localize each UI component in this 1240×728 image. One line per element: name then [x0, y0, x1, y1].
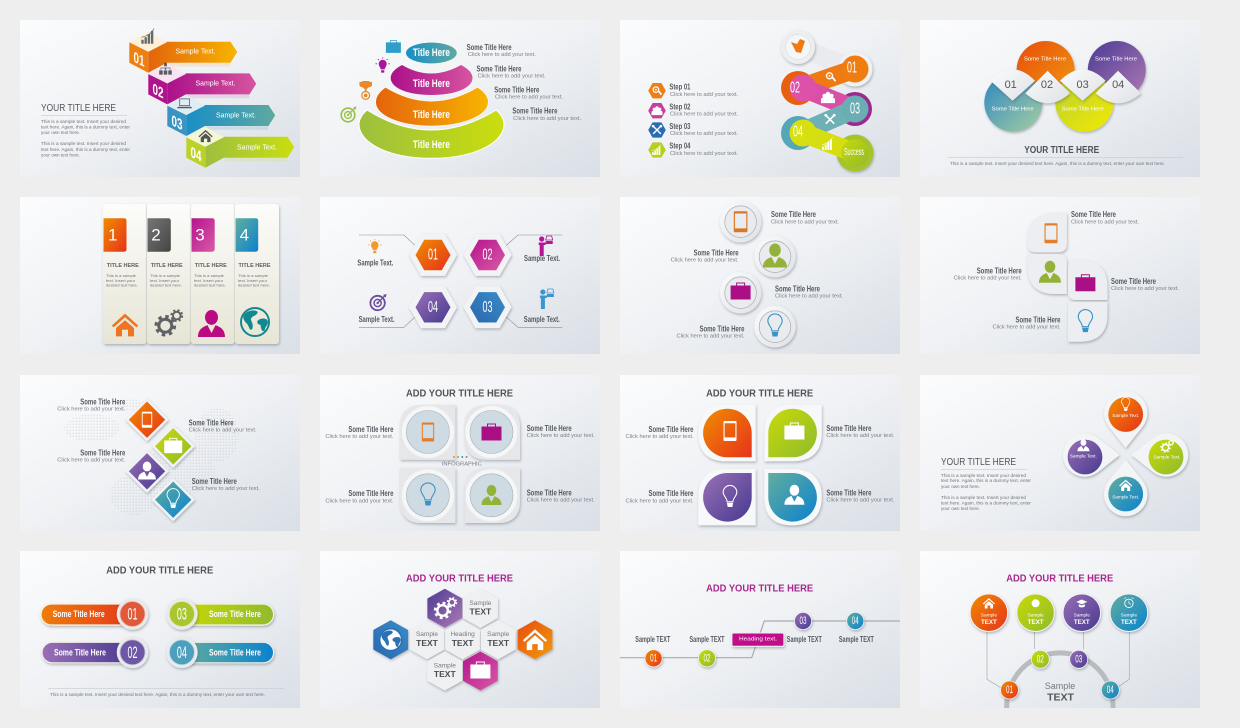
chain graphic [781, 30, 874, 172]
labels: Click here to add your text. [826, 498, 894, 504]
labels: Click here to add your text. [626, 434, 694, 440]
centre text [1045, 681, 1075, 703]
labels: Some Title Here [80, 448, 125, 458]
step list: Click here to add your text. [670, 131, 738, 137]
pill 04 [166, 636, 274, 668]
labels: Some Title Here [80, 397, 125, 407]
cube step 02: Sample Text. [196, 80, 236, 88]
arc [1007, 653, 1113, 708]
cube step 01 [129, 28, 237, 73]
text block: your own text here. [941, 484, 980, 489]
callout icons and labels: Sample Text. [357, 258, 393, 268]
node labels: Sample TEXT [690, 635, 725, 644]
honeycomb cells: TEXT [452, 638, 474, 648]
pill 03: 03 [177, 604, 187, 624]
title: ADD YOUR TITLE HERE [406, 388, 513, 400]
top circles: TEXT [1074, 619, 1090, 626]
centre text: TEXT [1047, 691, 1074, 703]
hexagon 04: 04 [428, 299, 438, 316]
heading box: Heading text. [739, 637, 777, 643]
panel: vertical cards [20, 197, 300, 354]
cube step 04: Sample Text. [237, 144, 277, 152]
labels: Click here to add your text. [775, 293, 843, 299]
title: ADD YOUR TITLE HERE [706, 583, 813, 595]
hexagon 03: 03 [482, 299, 493, 316]
labels: Some Title Here [977, 265, 1022, 275]
callout icons and labels [357, 236, 560, 324]
hexagon 03 [464, 286, 512, 328]
arc nodes: 04 [1107, 684, 1114, 696]
panel: stepped cubes [20, 20, 300, 177]
centre label: INFOGRAPHIC [442, 462, 482, 468]
title: ADD YOUR TITLE HERE [406, 572, 513, 584]
card 3: text. Insert your [194, 278, 224, 283]
footer text: This is a sample text. Insert your desired text here. Again, this is a dummy text, enter your own text here. [50, 692, 265, 697]
cube step 03: Sample Text. [216, 112, 256, 120]
hexagon 02: 02 [482, 246, 493, 264]
title: ADD YOUR TITLE HERE [1006, 572, 1113, 584]
pill 03 [166, 598, 274, 630]
text block: text here. Again, this is a dummy text, enter [41, 124, 131, 130]
card 3 [191, 204, 235, 344]
text block: your own text here. [41, 130, 80, 135]
labels: Click here to add your text. [513, 116, 581, 122]
step list: Click here to add your text. [670, 151, 738, 157]
honeycomb cells: TEXT [416, 638, 439, 648]
labels: Some Title Here [826, 423, 872, 433]
chain graphic: Success [844, 147, 864, 158]
labels: Some Title Here [648, 424, 694, 434]
labels: Some Title Here [775, 283, 820, 293]
pill 04: 04 [177, 643, 187, 662]
timeline nodes: 01 [650, 652, 657, 664]
callout icons and labels: Sample Text. [524, 315, 560, 324]
card 1 [103, 204, 146, 344]
diamond 2 [152, 425, 195, 468]
pin left: Sample Text. [1070, 454, 1097, 460]
pill 02 [42, 636, 148, 668]
text block: This is a sample text. Insert your desired [941, 473, 1027, 478]
labels: Some Title Here [467, 42, 512, 52]
arc nodes: 03 [1075, 653, 1082, 665]
honeycomb cells: Sample [469, 600, 492, 607]
chain graphic: 01 [847, 60, 857, 76]
pin top [1104, 391, 1147, 448]
arc nodes: 02 [1037, 653, 1044, 665]
panel: layered pyramid [320, 20, 600, 177]
cube step 04: 04 [190, 144, 202, 166]
diamond 1 [125, 398, 169, 441]
panel: round icon chain [620, 197, 900, 354]
panel: quad ring tiles [320, 375, 600, 531]
labels: Some Title Here [1071, 209, 1116, 219]
cube step 01: Sample Text. [176, 48, 216, 56]
cube step 02 [148, 63, 256, 104]
cube step 04 [186, 127, 294, 168]
honeycomb cells: Sample [434, 662, 456, 669]
pin top: Sample Text. [1112, 413, 1139, 419]
node labels: Sample TEXT [787, 635, 822, 644]
step list: Step 01 [669, 82, 691, 92]
panel: diamonds over dotted map [20, 375, 300, 531]
node labels: Sample TEXT [635, 635, 670, 644]
top circles: TEXT [981, 619, 997, 626]
step list: Step 03 [669, 121, 691, 131]
heading box [732, 633, 784, 646]
circles graphic: 01 [1005, 79, 1017, 91]
labels: Some Title Here [348, 488, 394, 498]
labels: Click here to add your text. [325, 434, 393, 440]
pin bottom [1104, 460, 1147, 516]
labels [57, 397, 260, 492]
labels: Click here to add your text. [626, 498, 694, 504]
circles graphic: 04 [1112, 79, 1124, 91]
text block [941, 457, 1032, 511]
top circles [970, 594, 1148, 632]
card 2: This is a sample [150, 273, 181, 278]
text block: This is a sample text. Insert your desired [41, 119, 127, 124]
text block [41, 103, 131, 158]
circles graphic: Some Title Here [1024, 56, 1066, 62]
chain graphic: 02 [790, 80, 800, 96]
hexagon 04 [409, 286, 457, 328]
pin left [1063, 433, 1120, 477]
pyramid layers: Title Here [413, 47, 450, 59]
labels: Some Title Here [648, 488, 694, 498]
text block: This is a sample text. Insert your desired [941, 495, 1027, 500]
labels: Click here to add your text. [189, 428, 257, 434]
labels: Click here to add your text. [954, 275, 1022, 281]
labels: Some Title Here [826, 487, 872, 497]
top circles: Sample [981, 612, 997, 618]
icons [341, 40, 401, 122]
text block: your own text here. [41, 152, 80, 158]
card 1: desired text here. [106, 282, 138, 288]
labels: Click here to add your text. [192, 486, 260, 492]
text block: YOUR TITLE HERE [941, 457, 1016, 468]
pyramid layers: Title Here [413, 109, 450, 121]
step list: Click here to add your text. [670, 112, 738, 118]
card 1: TITLE HERE [107, 263, 139, 269]
labels: Click here to add your text. [495, 94, 563, 100]
pin bottom: Sample Text. [1112, 494, 1139, 500]
top circles: Sample [1121, 612, 1137, 618]
arc nodes [1000, 650, 1119, 699]
leaf shapes [1027, 213, 1108, 342]
text block: YOUR TITLE HERE [41, 103, 116, 114]
circles graphic: 03 [1076, 79, 1089, 91]
card 4: TITLE HERE [238, 263, 271, 269]
labels: Some Title Here [1111, 276, 1156, 286]
text block: your own text here. [941, 506, 980, 511]
panel: step chain [620, 20, 900, 177]
circles graphic [984, 41, 1146, 132]
text block: text here. Again, this is a dummy text, enter [41, 147, 131, 152]
diamond 3 [125, 450, 169, 493]
timeline nodes: 02 [704, 652, 710, 664]
card 3: This is a sample [194, 273, 225, 278]
timeline path [620, 621, 900, 658]
panel: coloured petals [620, 375, 900, 531]
labels: Click here to add your text. [671, 257, 739, 263]
cube step 01: 01 [134, 49, 145, 71]
labels: Some Title Here [771, 209, 816, 219]
panel: honeycomb [320, 551, 600, 708]
title: ADD YOUR TITLE HERE [706, 388, 813, 400]
circles graphic: 02 [1041, 79, 1053, 91]
labels [467, 42, 581, 122]
title: ADD YOUR TITLE HERE [106, 565, 213, 577]
labels: Some Title Here [512, 106, 558, 116]
honeycomb cells: Heading [450, 631, 475, 638]
labels: Some Title Here [494, 84, 539, 94]
petals [698, 405, 822, 525]
honeycomb cells: Sample [416, 631, 438, 638]
pill 04: Some Title Here [209, 648, 261, 658]
labels: Click here to add your text. [57, 407, 125, 413]
pill 02: 02 [128, 643, 138, 662]
centre label [442, 456, 482, 468]
card 1: This is a sample [106, 273, 137, 278]
labels: Some Title Here [1016, 315, 1061, 325]
labels [325, 423, 595, 504]
chain graphic: 03 [850, 100, 860, 118]
cube step 03 [167, 95, 275, 136]
pill 01: 01 [128, 604, 138, 624]
labels: Click here to add your text. [1111, 286, 1179, 292]
step list: Click here to add your text. [670, 92, 738, 98]
labels: Some Title Here [700, 323, 745, 333]
card 2: TITLE HERE [151, 263, 183, 269]
node labels [635, 635, 874, 644]
card 4: desired text here. [238, 282, 270, 288]
step list: Step 02 [669, 101, 691, 111]
labels [626, 423, 894, 504]
top circles: Sample [1027, 612, 1044, 618]
callout icons and labels: Sample Text. [524, 254, 560, 263]
labels: Click here to add your text. [992, 325, 1060, 331]
panel: map pin cross [920, 375, 1200, 531]
pill 02: Some Title Here [54, 648, 106, 658]
text block: text here. Again, this is a dummy text, enter [941, 500, 1032, 506]
caption: This is a sample text. Insert your desired text here. Again, this is a dummy text, enter your own text here. [950, 161, 1165, 166]
diamond 4 [152, 478, 195, 521]
labels: Click here to add your text. [325, 498, 393, 504]
labels: Click here to add your text. [676, 334, 744, 340]
panel: pill buttons [20, 551, 300, 708]
centre text: Sample [1045, 681, 1075, 691]
step list [648, 82, 738, 158]
honeycomb cells: TEXT [470, 607, 492, 617]
panel: timeline [620, 551, 900, 708]
pill 01 [41, 598, 148, 630]
labels: Some Title Here [189, 418, 234, 428]
pyramid layers: Title Here [413, 139, 450, 151]
labels: Click here to add your text. [57, 458, 125, 464]
labels: Some Title Here [527, 487, 572, 497]
hexagon 01: 01 [428, 246, 438, 264]
timeline nodes: 03 [800, 615, 806, 627]
circles graphic: Some Title Here [1095, 56, 1137, 62]
cube step 02: 02 [152, 81, 164, 102]
labels: Click here to add your text. [527, 498, 595, 504]
text block: text here. Again, this is a dummy text, enter [941, 478, 1032, 483]
timeline nodes: 04 [852, 615, 859, 627]
connectors [987, 631, 1129, 688]
card 1: text. Insert your [106, 278, 136, 283]
card 1: 1 [108, 226, 117, 244]
card 4 [235, 204, 279, 344]
pill 03: Some Title Here [209, 609, 261, 619]
text block: This is a sample text. Insert your desired [41, 141, 127, 146]
panel: arc diagram [920, 551, 1200, 708]
pyramid layers: Title Here [413, 78, 450, 90]
labels: Click here to add your text. [478, 74, 546, 80]
connector lines [359, 235, 562, 327]
labels: Click here to add your text. [771, 219, 839, 225]
circle icons [720, 201, 796, 348]
panel: stacked leaves [920, 197, 1200, 354]
card 2 [147, 204, 191, 344]
card 4: This is a sample [238, 273, 269, 278]
labels: Click here to add your text. [1071, 219, 1139, 225]
labels: Some Title Here [348, 424, 394, 434]
chain graphic: 04 [793, 124, 803, 140]
top circles: Sample [1074, 612, 1090, 618]
card 3: TITLE HERE [195, 263, 227, 269]
card 4: 4 [240, 226, 249, 244]
circles graphic: Some Title Here [1062, 106, 1104, 112]
callout icons and labels: Sample Text. [359, 315, 395, 324]
tiles [400, 405, 520, 523]
honeycomb cells: Sample [487, 631, 510, 638]
card 2: 2 [151, 226, 161, 244]
labels: Some Title Here [476, 63, 522, 73]
pyramid layers [359, 42, 504, 158]
caption [947, 145, 1183, 166]
pin right: Sample Text. [1154, 454, 1180, 460]
labels: Some Title Here [527, 423, 572, 433]
step list: Step 04 [669, 141, 691, 151]
pin right [1132, 433, 1188, 477]
labels [954, 209, 1179, 331]
honeycomb cells: TEXT [487, 638, 510, 648]
card 2: text. Insert your [150, 278, 180, 283]
caption: YOUR TITLE HERE [1024, 145, 1099, 156]
top circles: TEXT [1121, 619, 1137, 626]
panel: hexagons with callouts [320, 197, 600, 354]
dotted world map [64, 398, 239, 515]
node labels: Sample TEXT [839, 635, 874, 644]
arc nodes: 01 [1006, 684, 1013, 696]
labels [671, 209, 843, 340]
labels: Some Title Here [694, 247, 739, 257]
card 3: desired text here. [194, 282, 226, 288]
pill 01: Some Title Here [53, 609, 105, 619]
card 2: desired text here. [150, 282, 182, 288]
hexagon 02 [464, 234, 512, 276]
hexagon 01 [409, 234, 457, 276]
honeycomb cells: TEXT [434, 669, 456, 679]
timeline nodes [645, 612, 864, 667]
cube step 03: 03 [172, 113, 183, 134]
top circles: TEXT [1028, 619, 1044, 626]
labels: Click here to add your text. [826, 433, 894, 439]
card 3: 3 [195, 226, 205, 244]
labels: Click here to add your text. [527, 433, 595, 439]
panel: overlapping circles [920, 20, 1200, 177]
card 4: text. Insert your [238, 278, 268, 283]
circles graphic: Some Title Here [992, 106, 1034, 112]
honeycomb cells [373, 589, 552, 690]
labels: Some Title Here [192, 476, 237, 486]
labels: Click here to add your text. [468, 52, 536, 58]
